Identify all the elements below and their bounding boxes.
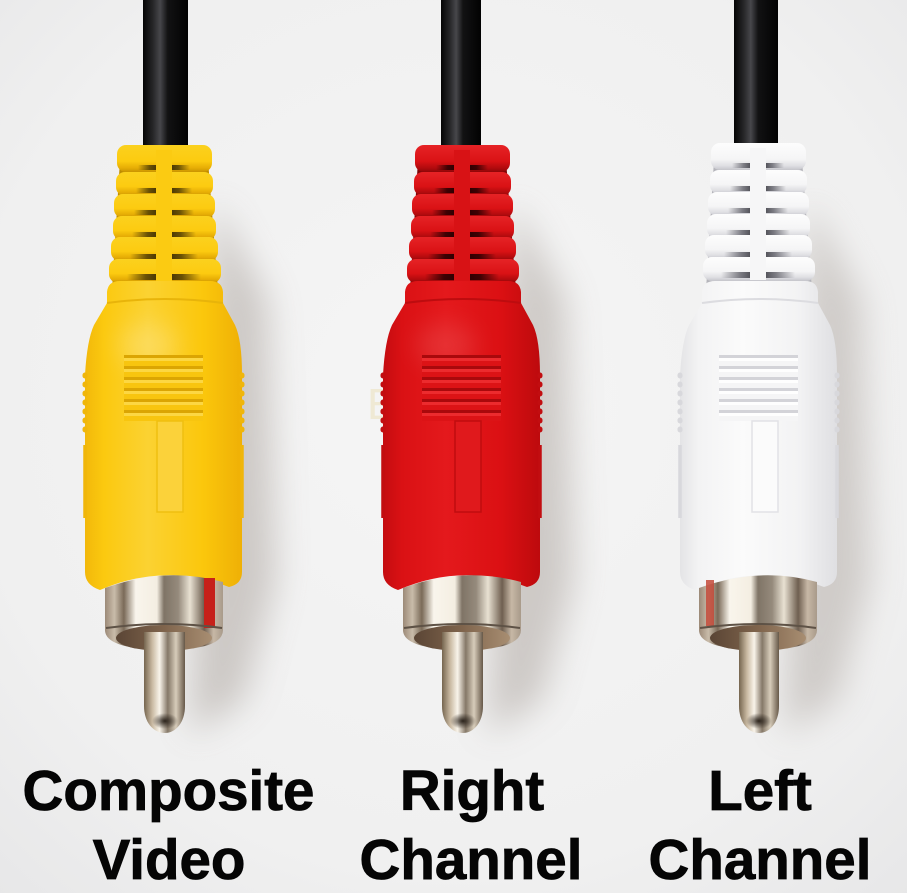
plug shadow [784,200,870,735]
housing body [85,281,242,590]
cable [441,0,481,146]
metal collar [699,575,817,651]
arrow stem [752,421,778,512]
label: Composite Video: Video [93,828,245,891]
center pin [442,632,483,733]
collar seam [702,299,818,303]
strain relief [109,145,221,290]
arrow stem [157,421,183,512]
metal collar [105,575,223,651]
label: Right Channel [360,759,582,891]
label: Right Channel: Right [400,759,544,822]
plug shadow [488,200,574,735]
plug: yellow composite video [85,0,276,735]
housing body [383,281,540,590]
strain relief [703,143,815,290]
cable [734,0,778,146]
side ridges [383,375,540,518]
cable [143,0,188,146]
plug: white left channel [680,0,870,735]
housing body [680,281,837,590]
body highlight [416,323,476,367]
label: Left Channel: Left [708,759,812,822]
label: Composite Video [23,759,314,891]
strain relief [407,145,519,290]
label: Left Channel: Channel [649,828,871,891]
plug shadow [190,200,276,735]
collar seam [107,299,223,303]
plug: red right channel [383,0,574,735]
grip lines [422,355,501,421]
center pin [144,632,185,733]
grip lines [719,355,798,421]
body highlight [118,323,178,367]
label: Left Channel [649,759,871,891]
side ridges [85,375,242,518]
label: Composite Video: Composite [23,759,314,822]
metal collar [403,575,521,651]
center pin [739,632,779,733]
collar seam [405,299,521,303]
arrow stem [455,421,481,512]
label: Right Channel: Channel [360,828,582,891]
side ridges [680,375,837,518]
grip lines [124,355,203,421]
watermark: ElecBee [367,380,531,429]
